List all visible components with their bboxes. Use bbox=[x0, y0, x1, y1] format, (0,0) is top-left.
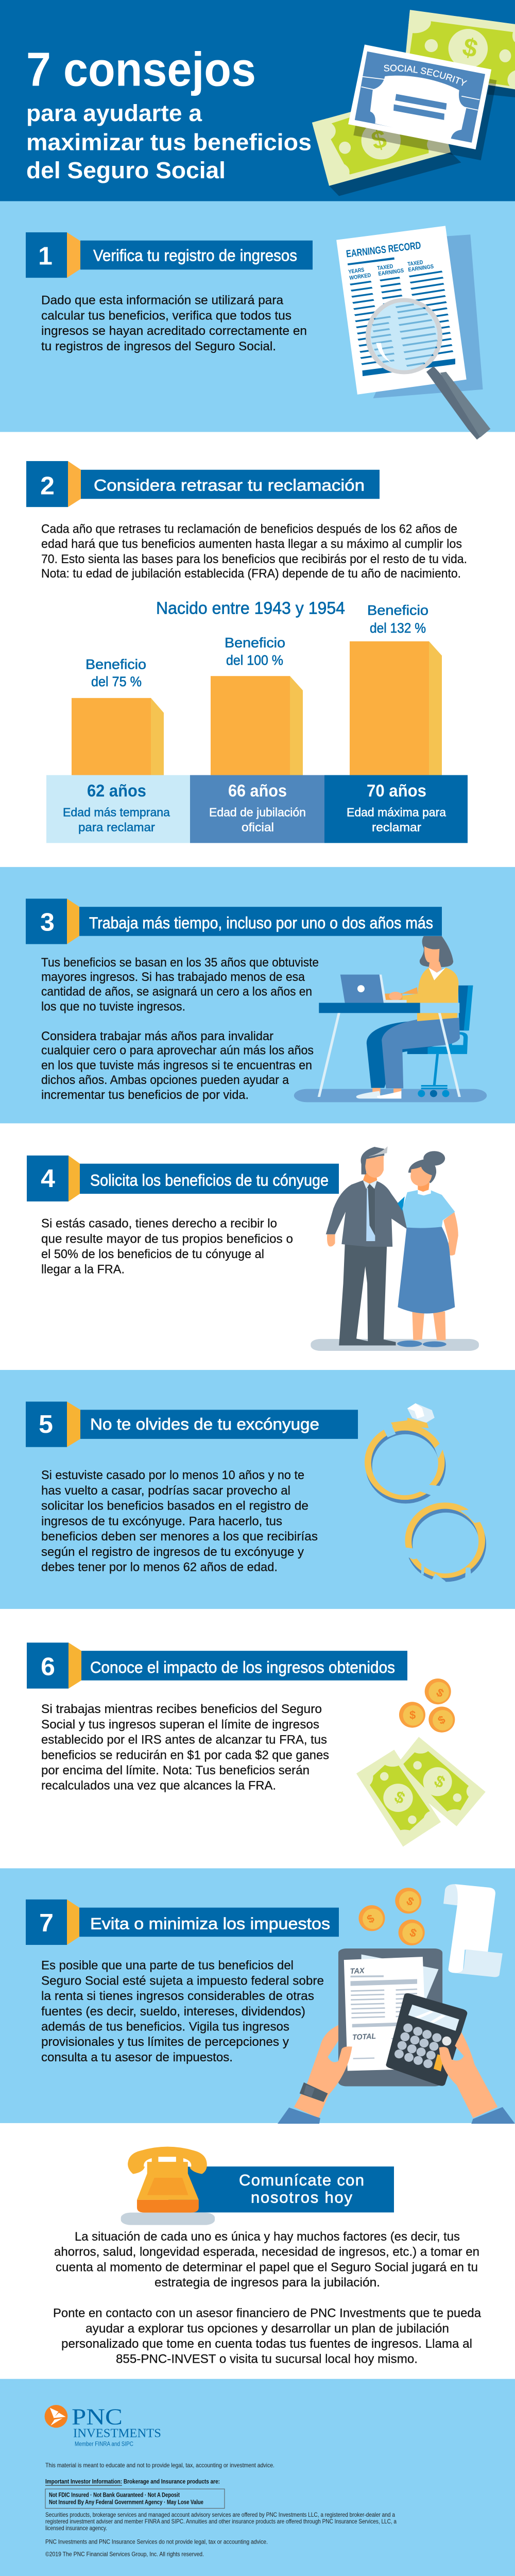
icon: woman at desk with laptop bbox=[294, 936, 487, 1102]
text block 6: por encima del límite. Nota: Tus beneficios serán bbox=[41, 1764, 310, 1777]
icon: broken wedding rings bbox=[365, 1403, 486, 1589]
icon: coins and bills: $ bbox=[434, 1686, 446, 1700]
label: 70 años: 70 años bbox=[367, 781, 426, 801]
label: 70 años bbox=[324, 775, 468, 843]
text block 5 bbox=[41, 1468, 318, 1574]
heading 2 bbox=[26, 461, 380, 507]
icon: telephone bbox=[121, 2147, 215, 2225]
text block 7: fuentes (es decir, sueldo, intereses, dividendos) bbox=[41, 2005, 305, 2019]
heading 4: Solicita los beneficios de tu cónyuge bbox=[90, 1171, 329, 1189]
bar: 66 años: Beneficio bbox=[225, 635, 285, 651]
disclosures: PNC Investments and PNC Insurance Services do not provide legal, tax or accounting advice. bbox=[45, 2538, 268, 2546]
label: 66 años: Edad de jubilación bbox=[209, 806, 306, 819]
text block 4: que resulte mayor de tus propios beneficios o bbox=[41, 1232, 293, 1246]
disclosures: Not FDIC Insured · Not Bank Guaranteed · Not A Deposit bbox=[49, 2491, 180, 2498]
icon: tax form, calculator, coins and hands: $ bbox=[408, 1926, 418, 1940]
text block 7: la renta si tienes ingresos considerables de otras bbox=[41, 1989, 314, 2003]
text block: contacto: 855-PNC-INVEST o visita tu sucursal local hoy mismo. bbox=[116, 2352, 418, 2366]
panel: section 5 background bbox=[0, 1370, 515, 1609]
icon: coins and bills: $ bbox=[392, 1787, 408, 1808]
heading 3: Trabaja más tiempo, incluso por uno o dos años más bbox=[89, 913, 433, 932]
icon: coins and bills: $ bbox=[431, 1771, 449, 1792]
icon: coins and bills: $ bbox=[409, 1709, 416, 1722]
heading 7 bbox=[26, 1900, 339, 1945]
heading 2: Considera retrasar tu reclamación bbox=[94, 476, 365, 494]
text block 6: recalculados una vez que alcances la FRA. bbox=[41, 1779, 276, 1793]
text block 5: solicitar los beneficios basados en el registro de bbox=[41, 1499, 308, 1513]
text block: contacto: personalizado que tome en cuenta todas tus fuentes de ingresos. Llama al bbox=[61, 2337, 472, 2351]
text block 2 bbox=[41, 522, 467, 581]
disclosures: licensed insurance agency. bbox=[45, 2524, 107, 2532]
label: 70 años: Edad máxima para bbox=[347, 806, 446, 819]
icon: earnings record and magnifier: TAXED bbox=[407, 259, 423, 267]
bar: 70 años: del 132 % bbox=[370, 620, 426, 636]
text block 3: dichos años. Ambas opciones pueden ayudar a bbox=[41, 1073, 289, 1087]
disclosures bbox=[45, 2462, 397, 2557]
icon: dollar bills and social security card: $ bbox=[460, 32, 480, 63]
icon: earnings record and magnifier: EARNINGS bbox=[378, 267, 404, 277]
label: 62 años: para reclamar bbox=[78, 821, 155, 834]
icon: dollar bills and social security card: SOCIAL SECURITY bbox=[384, 65, 468, 86]
bar: 62 años bbox=[72, 656, 164, 775]
icon: tax form, calculator, coins and hands: $ bbox=[365, 1911, 376, 1926]
icon: earnings record and magnifier: WORKED bbox=[349, 272, 371, 281]
panel: consejo 2 bbox=[26, 461, 468, 843]
text block 1: calcular tus beneficios, verifica que todos tus bbox=[41, 309, 291, 323]
icon: earnings record and magnifier: TAXED bbox=[377, 263, 393, 272]
text block 5: debes tener por lo menos 62 años de edad. bbox=[41, 1561, 278, 1574]
heading 1 bbox=[26, 232, 313, 278]
label: 66 años: 66 años bbox=[228, 781, 287, 801]
panel: consejo 3 bbox=[26, 899, 487, 1102]
text block 1: tu registros de ingresos del Seguro Social. bbox=[41, 340, 276, 353]
panel: footer background bbox=[0, 2379, 515, 2576]
icon: earnings record and magnifier: EARNINGS bbox=[408, 263, 434, 273]
disclosures: Important Investor Information: Brokerage and Insurance products are: bbox=[45, 2478, 220, 2485]
text block 2: Cada año que retrases tu reclamación de beneficios después de los 62 años de bbox=[41, 522, 457, 536]
text block 2: edad hará que tus beneficios aumenten hasta llegar a su máximo al cumplir los bbox=[41, 537, 462, 551]
text block: contacto: ayudar a explorar tus opciones y desarrollar un plan de jubilación bbox=[85, 2321, 449, 2335]
text block 3: los que no tuviste ingresos. bbox=[41, 999, 185, 1013]
icon: earnings record and magnifier: EARNINGS RECORD bbox=[346, 240, 422, 260]
title: maximizar tus beneficios bbox=[26, 129, 312, 155]
text block 3: Tus beneficios se basan en los 35 años que obtuviste bbox=[41, 956, 319, 970]
text block 7 bbox=[41, 1959, 324, 2064]
title: 7 consejos bbox=[26, 42, 256, 96]
label: 66 años bbox=[190, 775, 324, 843]
panel: header background bbox=[0, 0, 515, 201]
panel: section 7 background bbox=[0, 1868, 515, 2123]
panel: section 1 background bbox=[0, 201, 515, 432]
icon: tax form, calculator, coins and hands: $ bbox=[404, 1894, 416, 1908]
panel: consejo 4 bbox=[27, 1146, 479, 1351]
disclosures: This material is meant to educate and not to provide legal, tax, accounting or investment advice. bbox=[45, 2462, 274, 2469]
heading 5 bbox=[26, 1402, 358, 1447]
heading 7: 7 bbox=[39, 1908, 54, 1937]
heading 6: Conoce el impacto de los ingresos obtenidos bbox=[90, 1658, 395, 1676]
text block 3: Considera trabajar más años para invalidar bbox=[41, 1029, 273, 1043]
label: 62 años: Edad más temprana bbox=[63, 806, 170, 819]
heading 5: No te olvides de tu excónyuge bbox=[90, 1415, 319, 1433]
text block 4: Si estás casado, tienes derecho a recibir lo bbox=[41, 1217, 277, 1231]
text block 4: el 50% de los beneficios de tu cónyuge al bbox=[41, 1247, 264, 1261]
text block: contacto: estrategia de ingresos para la jubilación. bbox=[154, 2276, 380, 2290]
text block 6: establecido por el IRS antes de alcanzar tu FRA, tus bbox=[41, 1733, 327, 1747]
text block: contacto: La situación de cada uno es única y hay muchos factores (es decir, tus bbox=[75, 2230, 460, 2244]
text block 6: beneficios se reducirán en $1 por cada $2 que ganes bbox=[41, 1748, 329, 1762]
icon: coins and bills: $ bbox=[436, 1713, 448, 1727]
text block 3: en los que tuviste más ingresos si te encuentras en bbox=[41, 1058, 312, 1072]
text block 5: beneficios deben ser menores a los que recibirías bbox=[41, 1530, 318, 1544]
text block 5: ingresos de tu excónyuge. Para hacerlo, tus bbox=[41, 1514, 282, 1528]
heading 1: Verifica tu registro de ingresos bbox=[93, 246, 297, 264]
label: 62 años bbox=[46, 775, 190, 843]
heading 4: 4 bbox=[41, 1164, 55, 1193]
text block 7: consulta a tu asesor de impuestos. bbox=[41, 2050, 233, 2064]
text block 7: provisionales y tus límites de percepciones y bbox=[41, 2035, 289, 2049]
text block 7: Es posible que una parte de tus beneficios del bbox=[41, 1959, 294, 1973]
panel: consejo 6 bbox=[27, 1642, 486, 1846]
text block 3: cualquier cero o para aprovechar aún más los años bbox=[41, 1044, 314, 1058]
disclosures: registered investment adviser and member FINRA and SIPC. Annuities and other insurance products are offered through PNC Insurance Services, LLC, a bbox=[45, 2518, 397, 2525]
bar: 62 años: del 75 % bbox=[91, 674, 142, 689]
text block 3: incrementar tus beneficios de por vida. bbox=[41, 1088, 249, 1102]
text block 4: llegar a la FRA. bbox=[41, 1263, 125, 1277]
icon: tax form, calculator, coins and hands: TOTAL bbox=[352, 2032, 376, 2042]
heading 6: 6 bbox=[41, 1652, 55, 1681]
text block 6: Si trabajas mientras recibes beneficios del Seguro bbox=[41, 1702, 322, 1716]
disclosures: Securities products, brokerage services and managed account advisory services are offered by PNC Investments LLC, a registered broker-dealer and a bbox=[45, 2511, 395, 2518]
text block 5: según el registro de ingresos de tu excónyuge y bbox=[41, 1545, 304, 1559]
panel: consejo 5 bbox=[26, 1402, 486, 1589]
text block 2: Nota: tu edad de jubilación establecida (FRA) depende de tu año de nacimiento. bbox=[41, 567, 461, 581]
bar: 66 años: del 100 % bbox=[226, 652, 283, 668]
text block: contacto: Ponte en contacto con un asesor financiero de PNC Investments que te pueda bbox=[53, 2307, 482, 2320]
heading 3 bbox=[26, 899, 442, 944]
text block 1: ingresos se hayan acreditado correctamente en bbox=[41, 324, 307, 338]
text block 3: mayores ingresos. Si has trabajado menos de esa bbox=[41, 970, 305, 984]
text block 6: Social y tus ingresos superan el límite de ingresos bbox=[41, 1718, 319, 1732]
bar: 66 años bbox=[211, 635, 303, 775]
text block 1 bbox=[41, 294, 307, 353]
icon: dollar bills and social security card: $ bbox=[368, 124, 389, 155]
disclosures: Not Insured By Any Federal Government Agency · May Lose Value bbox=[49, 2498, 203, 2505]
title: para ayudarte a bbox=[26, 100, 202, 126]
panel: consejo 1 bbox=[26, 226, 490, 439]
disclosures: ©2019 The PNC Financial Services Group, Inc. All rights reserved. bbox=[45, 2550, 204, 2557]
text block 3 bbox=[41, 956, 319, 1102]
text block 3: cantidad de años, se asignará un cero a los años en bbox=[41, 985, 312, 999]
chart heading: Nacido entre 1943 y 1954 bbox=[156, 598, 345, 618]
text block: contacto: ahorros, salud, longevidad esperada, necesidad de ingresos, etc.) a tomar en bbox=[54, 2245, 479, 2259]
heading 7: Evita o minimiza los impuestos bbox=[90, 1914, 330, 1933]
heading 5: 5 bbox=[39, 1410, 53, 1438]
panel: consejo 7 bbox=[26, 1884, 515, 2124]
panel: section 3 background bbox=[0, 867, 515, 1123]
label: 66 años: oficial bbox=[242, 821, 274, 834]
title bbox=[26, 42, 312, 183]
panel: contacto bbox=[53, 2147, 482, 2366]
heading: comunícate: nosotros hoy bbox=[251, 2189, 353, 2206]
logo: PNC Investments: Member FINRA and SIPC bbox=[75, 2440, 133, 2447]
text block 1: Dado que esta información se utilizará para bbox=[41, 294, 284, 308]
text block 5: Si estuviste casado por lo menos 10 años y no te bbox=[41, 1468, 304, 1482]
bar chart: benefit by claiming age bbox=[46, 598, 468, 843]
text block 2: 70. Esto sienta las bases para los beneficios que recibirás por el resto de tu vida. bbox=[41, 552, 467, 566]
label: 62 años: 62 años bbox=[87, 781, 146, 801]
label: 70 años: reclamar bbox=[372, 821, 421, 834]
title: del Seguro Social bbox=[26, 157, 226, 183]
heading 3: 3 bbox=[40, 908, 55, 937]
icon: earnings record and magnifier bbox=[336, 226, 490, 439]
text block: contacto bbox=[53, 2230, 482, 2366]
text block 7: además de tus beneficios. Vigila tus ingresos bbox=[41, 2020, 289, 2033]
bar: 70 años bbox=[350, 602, 442, 775]
text block 5: has vuelto a casar, podrías sacar provecho al bbox=[41, 1484, 290, 1498]
logo: PNC Investments: PNC bbox=[72, 2404, 123, 2430]
heading: comunícate bbox=[168, 2166, 394, 2212]
bar: 62 años: Beneficio bbox=[85, 656, 146, 672]
logo: PNC Investments: INVESTMENTS bbox=[73, 2427, 161, 2440]
heading 1: 1 bbox=[38, 242, 53, 270]
text block 4 bbox=[41, 1217, 293, 1277]
icon: coins and bills bbox=[356, 1679, 486, 1846]
panel: footer bbox=[45, 2404, 397, 2557]
icon: earnings record and magnifier: YEARS bbox=[348, 267, 365, 275]
icon: couple bbox=[311, 1146, 479, 1351]
heading: comunícate: Comunícate con bbox=[239, 2171, 364, 2189]
bar: 70 años: Beneficio bbox=[367, 602, 428, 618]
text block 7: Seguro Social esté sujeta a impuesto federal sobre bbox=[41, 1974, 324, 1988]
heading 4 bbox=[27, 1156, 339, 1201]
heading 2: 2 bbox=[40, 471, 55, 500]
icon: dollar bills and social security card bbox=[312, 10, 515, 196]
logo: PNC Investments bbox=[45, 2404, 161, 2447]
icon: tax form, calculator, coins and hands: TAX bbox=[350, 1967, 365, 1976]
heading 6 bbox=[27, 1642, 407, 1689]
text block 6 bbox=[41, 1702, 329, 1793]
text block: contacto: cuenta al momento de determinar el papel que el Seguro Social jugará en tu bbox=[56, 2260, 478, 2274]
icon: tax form, calculator, coins and hands bbox=[278, 1884, 515, 2124]
